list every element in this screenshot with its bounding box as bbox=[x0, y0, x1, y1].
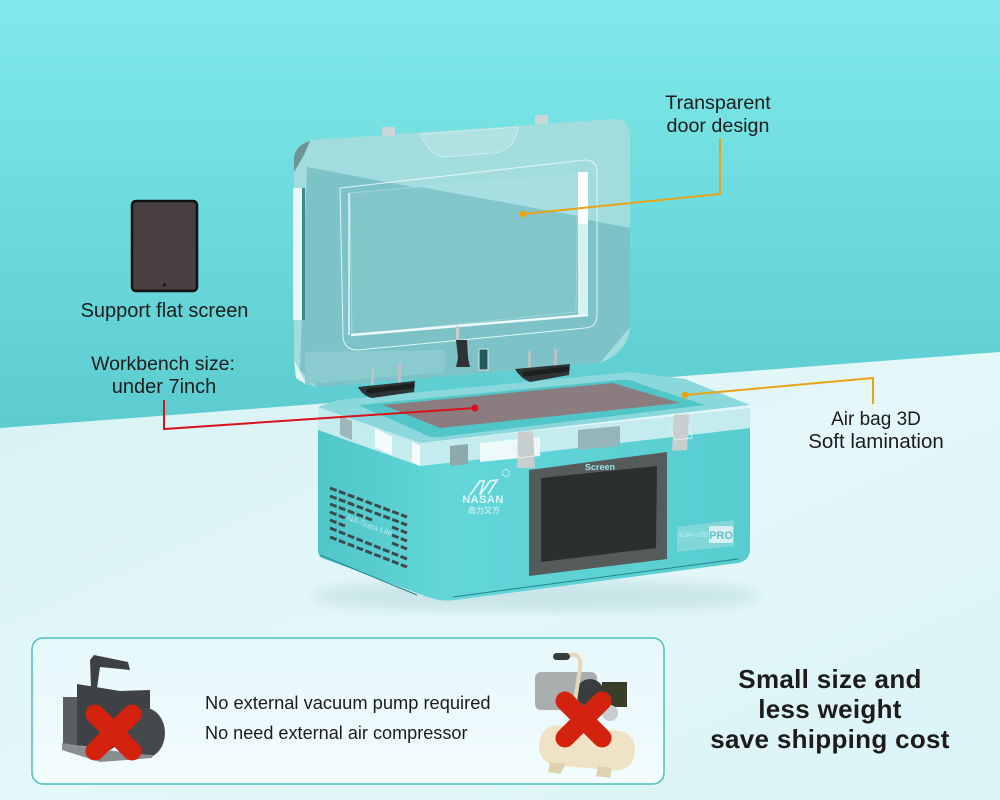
panel: no external equipment bbox=[32, 638, 664, 784]
callout line: workbench bbox=[164, 400, 478, 429]
icon: air compressor bbox=[535, 653, 637, 778]
callout text: air bag: Air bag 3D bbox=[831, 409, 921, 430]
machine shadow bbox=[310, 580, 760, 612]
pro badge: PRO bbox=[709, 530, 733, 542]
headline: save shipping cost bbox=[710, 724, 950, 754]
callout line: transparent door bbox=[520, 138, 720, 218]
callout text: workbench: Workbench size: bbox=[91, 353, 235, 375]
machine top plate bbox=[318, 372, 750, 443]
callout text: air bag: Soft lamination bbox=[808, 430, 944, 453]
headline: Small size and bbox=[738, 664, 922, 694]
headline bbox=[710, 664, 950, 754]
hinge right bbox=[515, 349, 570, 382]
screen label: Screen bbox=[585, 462, 615, 472]
support flat screen label: Support flat screen bbox=[81, 300, 248, 322]
background wall bbox=[0, 0, 1000, 430]
latch right bbox=[669, 414, 692, 451]
callout text: transparent door: Transparent bbox=[665, 92, 771, 114]
brand logo bbox=[462, 470, 510, 515]
callout text: transparent door: door design bbox=[667, 115, 769, 137]
vent grille bbox=[330, 488, 407, 567]
latch left bbox=[513, 431, 540, 468]
screen bezel bbox=[529, 452, 667, 576]
icon: vacuum pump bbox=[62, 655, 165, 762]
icon: red cross bbox=[95, 714, 132, 751]
base line bbox=[320, 555, 417, 595]
icon: flat screen tablet bbox=[132, 201, 197, 291]
callout text: workbench: under 7inch bbox=[112, 376, 216, 398]
panel: no external equipment: No need external air compressor bbox=[205, 723, 467, 743]
callout line: air bag bbox=[682, 378, 873, 404]
machine body bbox=[318, 425, 750, 600]
transparent lid bbox=[293, 115, 630, 387]
pro badge: SUPA LITE bbox=[678, 533, 708, 539]
hinge left bbox=[358, 363, 415, 398]
workbench rim and silicone pad bbox=[358, 380, 705, 437]
icon: red cross bbox=[565, 701, 602, 738]
glass band bbox=[318, 407, 750, 466]
model text: NA-Supa Lite bbox=[346, 513, 394, 538]
screen display bbox=[541, 466, 657, 562]
headline: less weight bbox=[758, 694, 902, 724]
brand logo: 南力又方 bbox=[468, 505, 500, 515]
pro badge bbox=[677, 520, 734, 552]
panel text: No external vacuum pump required bbox=[205, 692, 491, 713]
brand logo: NASAN bbox=[462, 494, 504, 506]
background floor bbox=[0, 352, 1000, 800]
